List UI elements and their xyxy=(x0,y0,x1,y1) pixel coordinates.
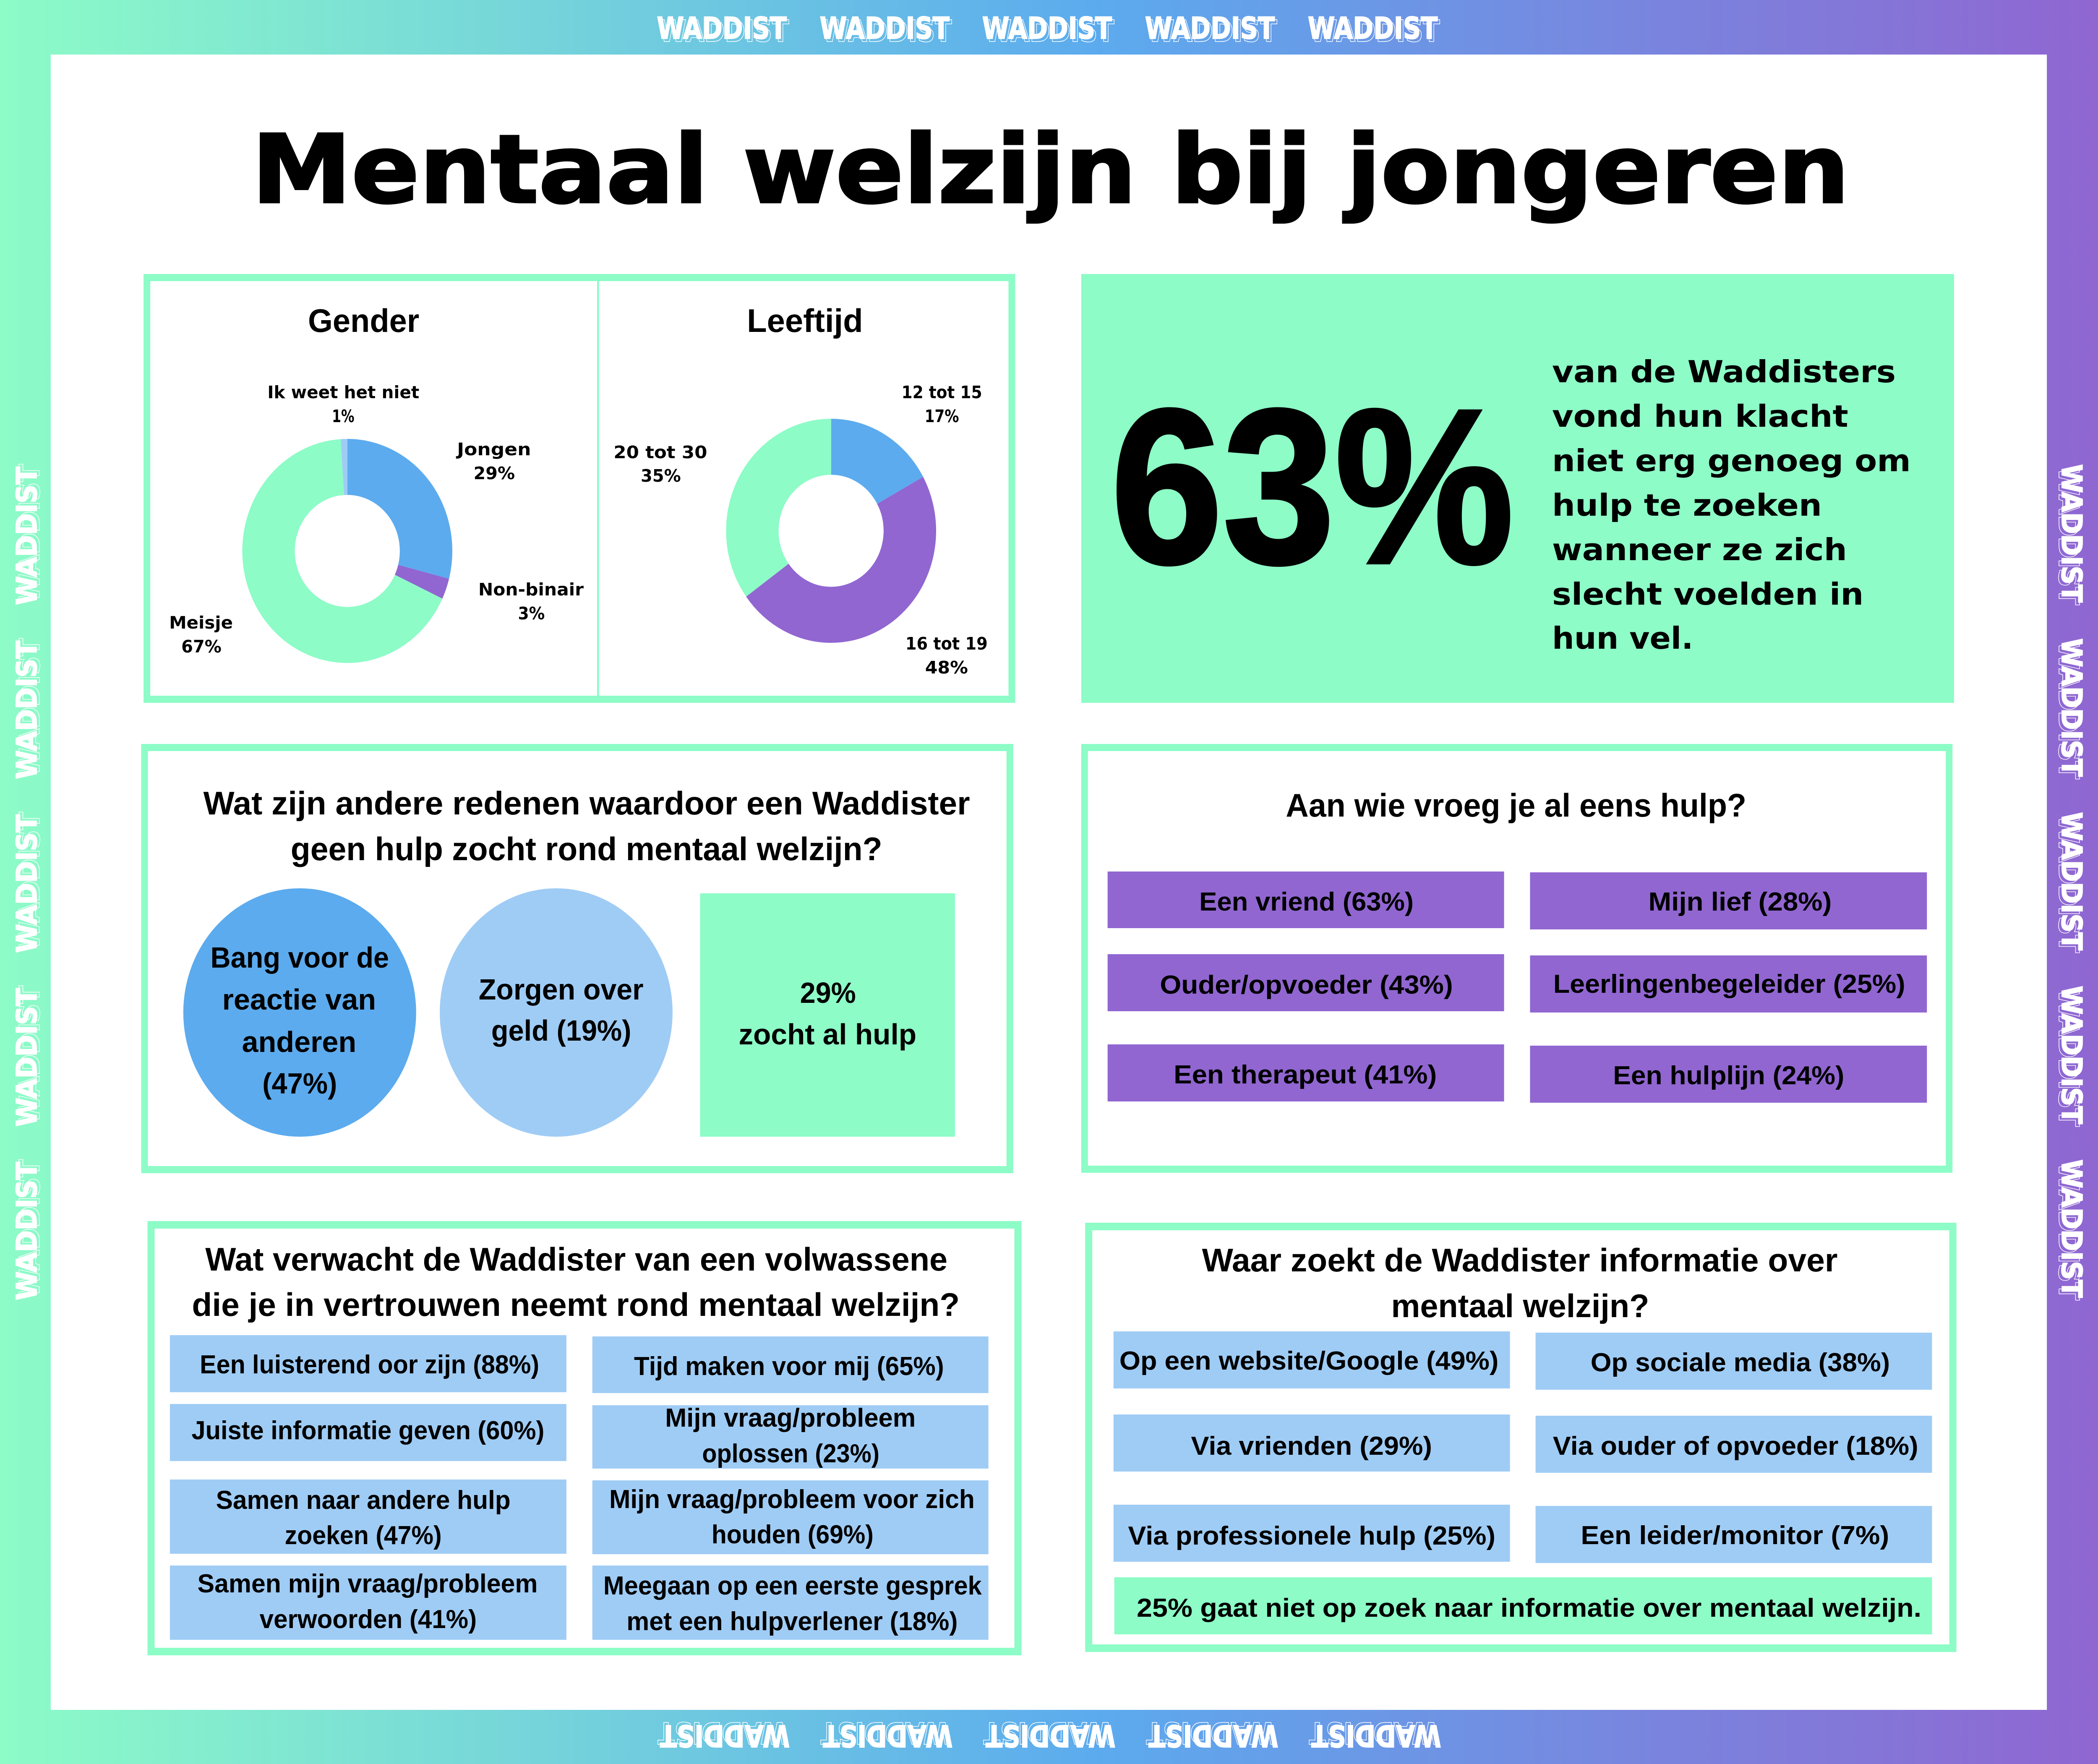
heading: expectations xyxy=(192,1242,960,1323)
panel: reasons for not seeking help xyxy=(144,748,1010,1170)
label: 20 tot 30: 35% xyxy=(641,466,681,486)
chip: Via vrienden xyxy=(1114,1414,1510,1472)
top banner: WADDIST repeated: WADDIST xyxy=(657,11,787,46)
bottom banner: WADDIST rotated 180 degrees: WADDIST xyxy=(1311,1718,1441,1753)
circle: Bang voor de reactie van anderen: anderen xyxy=(242,1026,356,1058)
right banner: WADDIST reading downward: WADDIST xyxy=(2055,638,2088,777)
left banner: WADDIST reading upward: WADDIST xyxy=(11,1162,44,1300)
right banner: WADDIST reading downward: WADDIST xyxy=(2052,641,2085,779)
chip: Mijn lief xyxy=(1530,872,1927,929)
right banner: WADDIST reading downward: WADDIST xyxy=(2052,467,2085,605)
chip: Een leider/monitor: Een leider/monitor (7%) xyxy=(1581,1521,1889,1550)
bottom banner: WADDIST rotated 180 degrees: WADDIST xyxy=(660,1718,790,1753)
label: Non-binair: 3% xyxy=(518,604,545,624)
statistic description: hulp te zoeken xyxy=(1552,488,1822,523)
top banner: WADDIST repeated: WADDIST xyxy=(820,11,950,46)
bottom banner: WADDIST rotated 180 degrees xyxy=(658,1715,1441,1753)
box: 29% zocht al hulp: zocht al hulp xyxy=(738,1018,916,1051)
bottom banner: WADDIST rotated 180 degrees: WADDIST xyxy=(986,1718,1115,1753)
statistic description: niet erg genoeg om xyxy=(1552,444,1911,479)
statistic description: vond hun klacht xyxy=(1552,399,1848,434)
label: Ik weet het niet xyxy=(267,383,419,426)
left banner: WADDIST reading upward: WADDIST xyxy=(11,467,44,605)
chip: Samen mijn vraag/probleem verwoorden xyxy=(170,1566,566,1640)
label: Non-binair: Non-binair xyxy=(478,580,584,600)
chip: Op sociale media xyxy=(1536,1333,1932,1390)
label: Meisje: 67% xyxy=(181,637,222,657)
circle: Bang voor de reactie van anderen: (47%) xyxy=(262,1067,337,1100)
chip: Tijd maken voor mij xyxy=(592,1336,989,1393)
panel: 63% statistic xyxy=(1081,274,1954,703)
panel: expectations of a trusted adult xyxy=(151,1225,1018,1652)
chip: Samen naar andere hulp zoeken xyxy=(170,1480,566,1554)
chip: Mijn vraag/probleem oplossen: oplossen (23%) xyxy=(702,1439,879,1468)
bottom banner: WADDIST rotated 180 degrees: WADDIST xyxy=(1309,1715,1439,1750)
circle: Bang voor de reactie van anderen: Bang voor de xyxy=(210,942,389,974)
label: 16 tot 19: 16 tot 19 xyxy=(905,634,988,654)
bottom banner: WADDIST rotated 180 degrees: WADDIST xyxy=(1148,1718,1278,1753)
chip: Meegaan op een eerste gesprek xyxy=(592,1566,989,1640)
chip: Meegaan op een eerste gesprek: Meegaan op een eerste gesprek xyxy=(603,1571,982,1600)
chip: Ouder/opvoeder: Ouder/opvoeder (43%) xyxy=(1160,970,1453,999)
right banner: WADDIST reading downward: WADDIST xyxy=(2055,986,2088,1124)
chip: Mijn vraag/probleem voor zich houden xyxy=(592,1480,989,1554)
right banner: WADDIST reading downward: WADDIST xyxy=(2052,1162,2085,1300)
right banner: WADDIST reading downward: WADDIST xyxy=(2052,814,2085,953)
label: 20 tot 30: 20 tot 30 xyxy=(613,443,707,462)
callout: 25% gaat niet op zoek: 25% gaat niet op zoek naar informatie over mentaal welzijn. xyxy=(1137,1593,1921,1622)
chip: Mijn vraag/probleem oplossen xyxy=(592,1403,989,1469)
chip: Een hulplijn: Een hulplijn (24%) xyxy=(1613,1061,1844,1090)
chip: Meegaan op een eerste gesprek: met een hulpverlener (18%) xyxy=(626,1607,958,1636)
label: Non-binair xyxy=(478,580,584,624)
label: 16 tot 19: 48% xyxy=(925,658,968,678)
box: 29% zocht al hulp xyxy=(700,893,955,1137)
top banner: WADDIST repeated: WADDIST xyxy=(822,14,952,49)
right banner: WADDIST reading downward: WADDIST xyxy=(2055,812,2088,950)
chip: Een hulplijn xyxy=(1530,1046,1927,1103)
chip: Mijn vraag/probleem voor zich houden: houden (69%) xyxy=(712,1520,874,1549)
heading: Aan wie vroeg je al eens hulp?: Aan wie vroeg je al eens hulp? xyxy=(1286,788,1746,824)
circle: Zorgen over geld xyxy=(440,888,673,1137)
bottom banner: WADDIST rotated 180 degrees: WADDIST xyxy=(1146,1715,1276,1750)
title: Mentaal welzijn bij jongeren xyxy=(252,115,1850,225)
label: 20 tot 30 xyxy=(613,443,707,486)
heading: Leeftijd: Leeftijd xyxy=(747,303,863,339)
statistic description xyxy=(1552,355,1911,656)
heading: expectations: Wat verwacht de Waddister van een volwassene xyxy=(205,1242,947,1278)
top banner: WADDIST repeated: WADDIST xyxy=(1147,14,1277,49)
circle: Bang voor de reactie van anderen xyxy=(183,888,416,1137)
chip: Een therapeut xyxy=(1108,1044,1504,1101)
statistic description: slecht voelden in xyxy=(1552,577,1863,612)
right banner: WADDIST reading downward: WADDIST xyxy=(2055,1159,2088,1298)
top banner: WADDIST repeated: WADDIST xyxy=(984,14,1114,49)
heading: other reasons: Wat zijn andere redenen waardoor een Waddister xyxy=(204,785,970,822)
chip: Een vriend: Een vriend (63%) xyxy=(1199,887,1414,916)
chip: Samen mijn vraag/probleem verwoorden: verwoorden (41%) xyxy=(260,1605,477,1634)
left banner: WADDIST reading upward: WADDIST xyxy=(14,464,46,603)
chip: Een luisterend oor zijn: Een luisterend oor zijn (88%) xyxy=(200,1350,539,1379)
panel: where young people look for information xyxy=(1089,1226,1953,1648)
chip: Via professionele hulp: Via professionele hulp (25%) xyxy=(1128,1521,1495,1550)
right banner: WADDIST reading downward: WADDIST xyxy=(2055,464,2088,603)
right banner: WADDIST reading downward xyxy=(2052,464,2088,1300)
left banner: WADDIST reading upward: WADDIST xyxy=(14,812,46,950)
chip: Via ouder of opvoeder xyxy=(1536,1416,1932,1473)
heading: other reasons: geen hulp zocht rond mentaal welzijn? xyxy=(291,831,882,868)
top banner: WADDIST repeated: WADDIST xyxy=(1308,11,1438,46)
chip: Juiste informatie geven xyxy=(170,1404,566,1461)
top banner: WADDIST repeated: WADDIST xyxy=(1310,14,1440,49)
chip: Leerlingenbegeleider: Leerlingenbegeleider (25%) xyxy=(1553,969,1905,998)
chip: Samen naar andere hulp zoeken: Samen naar andere hulp xyxy=(216,1485,511,1514)
chip: Een vriend xyxy=(1108,872,1504,928)
chart: gender donut xyxy=(269,467,426,635)
callout: 25% gaat niet op zoek xyxy=(1114,1577,1932,1634)
label: Ik weet het niet: 1% xyxy=(332,407,355,426)
heading: where to find information xyxy=(1202,1242,1837,1325)
chip: Een leider/monitor xyxy=(1536,1506,1932,1563)
chip: Mijn vraag/probleem oplossen: Mijn vraag/probleem xyxy=(665,1403,916,1432)
heading: Gender: Gender xyxy=(308,303,419,339)
big number 63%: 63% xyxy=(1111,363,1514,609)
left banner: WADDIST reading upward: WADDIST xyxy=(11,641,44,779)
chip: Op een website/Google: Op een website/Google (49%) xyxy=(1119,1346,1498,1375)
right banner: WADDIST reading downward: WADDIST xyxy=(2052,988,2085,1127)
top banner: WADDIST repeated: WADDIST xyxy=(982,11,1112,46)
left banner: WADDIST reading upward xyxy=(11,464,46,1300)
statistic description: hun vel. xyxy=(1552,621,1693,656)
label: Meisje: Meisje xyxy=(169,613,233,633)
chip: Tijd maken voor mij: Tijd maken voor mij (65%) xyxy=(634,1352,944,1380)
bottom banner: WADDIST rotated 180 degrees: WADDIST xyxy=(820,1715,950,1750)
chip: Samen naar andere hulp zoeken: zoeken (47%) xyxy=(285,1521,442,1550)
label: Jongen xyxy=(456,440,531,483)
left banner: WADDIST reading upward: WADDIST xyxy=(14,986,46,1124)
label: Ik weet het niet: Ik weet het niet xyxy=(267,383,419,402)
heading: where to find information: Waar zoekt de Waddister informatie over xyxy=(1202,1242,1837,1279)
panel: who did you ask for help xyxy=(1085,748,1949,1169)
heading: other reasons xyxy=(204,785,970,868)
statistic description: van de Waddisters xyxy=(1552,355,1896,390)
label: 16 tot 19 xyxy=(905,634,988,678)
label: 12 tot 15 xyxy=(901,383,982,426)
chip: Een therapeut: Een therapeut (41%) xyxy=(1174,1060,1437,1089)
chip: Een luisterend oor zijn xyxy=(170,1335,566,1392)
chip: Leerlingenbegeleider xyxy=(1530,955,1927,1012)
label: 12 tot 15: 17% xyxy=(925,407,959,426)
bottom banner: WADDIST rotated 180 degrees: WADDIST xyxy=(983,1715,1113,1750)
top banner: WADDIST repeated xyxy=(657,11,1440,49)
top banner: WADDIST repeated: WADDIST xyxy=(1145,11,1275,46)
chip: Via professionele hulp xyxy=(1114,1505,1510,1562)
chip: Op sociale media: Op sociale media (38%) xyxy=(1591,1348,1890,1377)
label: 12 tot 15: 12 tot 15 xyxy=(901,383,982,402)
label: Jongen: 29% xyxy=(474,464,515,483)
left banner: WADDIST reading upward: WADDIST xyxy=(11,988,44,1127)
panel: gender and age demographics xyxy=(147,277,1012,699)
box: 29% zocht al hulp: 29% xyxy=(800,977,856,1009)
heading: expectations: die je in vertrouwen neemt rond mentaal welzijn? xyxy=(192,1287,960,1323)
chart: age donut xyxy=(752,447,910,615)
circle: Zorgen over geld: geld (19%) xyxy=(491,1015,631,1047)
bottom banner: WADDIST rotated 180 degrees: WADDIST xyxy=(658,1715,788,1750)
chip: Samen mijn vraag/probleem verwoorden: Samen mijn vraag/probleem xyxy=(198,1569,538,1598)
left banner: WADDIST reading upward: WADDIST xyxy=(14,1159,46,1298)
chip: Op een website/Google xyxy=(1114,1331,1510,1388)
statistic description: wanneer ze zich xyxy=(1552,532,1847,568)
label: Jongen: Jongen xyxy=(456,440,531,459)
label: Meisje xyxy=(169,613,233,657)
bottom banner: WADDIST rotated 180 degrees: WADDIST xyxy=(823,1718,952,1753)
circle: Bang voor de reactie van anderen: reactie van xyxy=(222,984,376,1016)
heading: where to find information: mentaal welzijn? xyxy=(1391,1288,1649,1325)
chip: Juiste informatie geven: Juiste informatie geven (60%) xyxy=(192,1416,544,1445)
chip: Via ouder of opvoeder: Via ouder of opvoeder (18%) xyxy=(1553,1431,1918,1460)
chip: Via vrienden: Via vrienden (29%) xyxy=(1191,1431,1432,1460)
chip: Ouder/opvoeder xyxy=(1108,954,1504,1011)
left banner: WADDIST reading upward: WADDIST xyxy=(14,638,46,777)
circle: Zorgen over geld: Zorgen over xyxy=(479,973,644,1006)
left banner: WADDIST reading upward: WADDIST xyxy=(11,814,44,953)
chip: Mijn vraag/probleem voor zich houden: Mijn vraag/probleem voor zich xyxy=(609,1485,975,1513)
chip: Mijn lief: Mijn lief (28%) xyxy=(1649,887,1832,916)
top banner: WADDIST repeated: WADDIST xyxy=(659,14,789,49)
